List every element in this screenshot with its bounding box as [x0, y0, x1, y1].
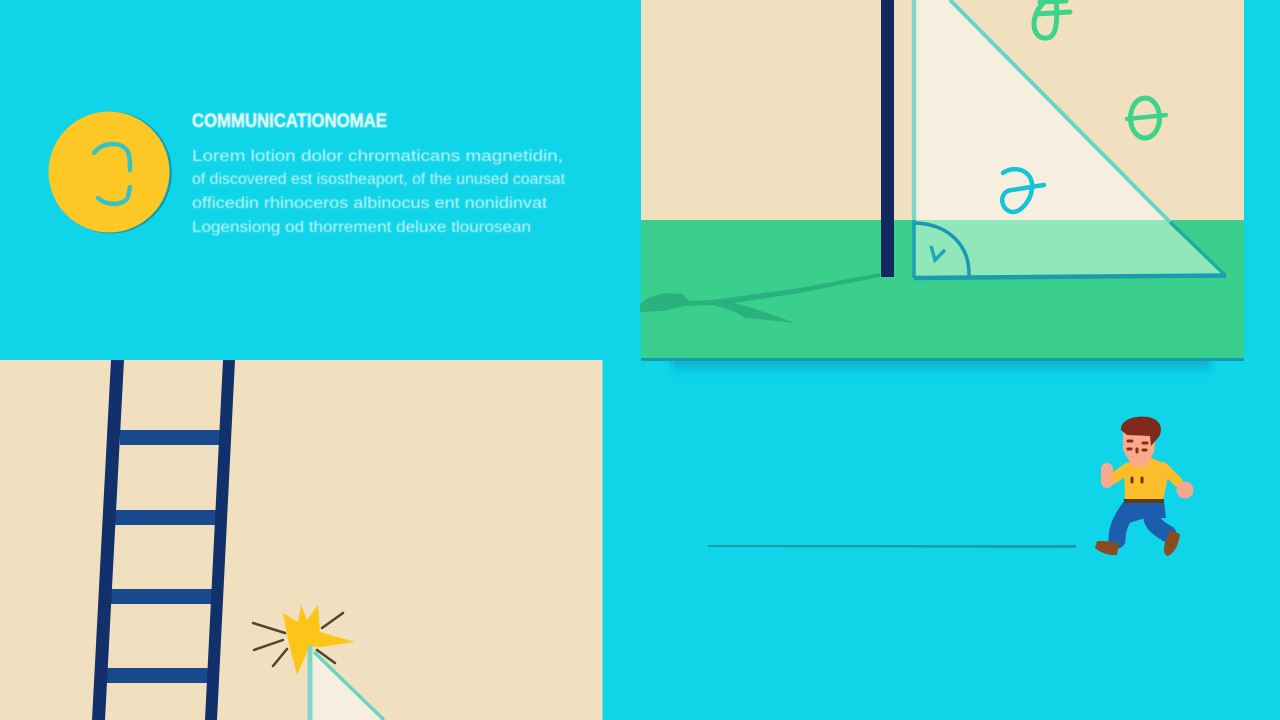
panel: top right wall and ground	[640, 0, 1244, 380]
symbols on triangle	[1002, 0, 1166, 212]
panel: bottom left wall	[0, 360, 602, 720]
head	[1123, 430, 1156, 467]
body text block	[192, 148, 566, 236]
hair	[1121, 417, 1161, 446]
body text block: Logensiong od thorrement deluxe tlourosean	[192, 219, 531, 236]
heading: COMMUNICATIONOMAE	[192, 111, 387, 132]
icon: star burst	[253, 605, 355, 675]
torso	[1124, 458, 1170, 502]
symbol: partial	[1002, 169, 1044, 212]
icon: yellow circle badge	[48, 112, 172, 234]
shoes	[1095, 541, 1119, 555]
ladder pole	[881, 0, 894, 277]
triangle tip	[310, 646, 385, 720]
ground line	[708, 545, 1076, 548]
symbol: theta middle	[1127, 98, 1166, 138]
body text block: of discovered est isostheaport, of the unused coarsat	[192, 171, 566, 188]
figure: running man	[1095, 417, 1194, 556]
legs	[1117, 506, 1168, 540]
triangle	[914, 0, 1226, 278]
right angle marker	[915, 223, 969, 276]
body text block: Lorem lotion dolor chromaticans magnetidin,	[192, 148, 563, 165]
ladder shadow	[640, 273, 880, 323]
face details	[1128, 441, 1147, 482]
ladder	[92, 360, 235, 720]
arms	[1107, 468, 1128, 481]
body text block: officedin rhinoceros albinocus ent nonidinvat	[192, 195, 548, 212]
symbol: theta top	[1034, 0, 1070, 38]
